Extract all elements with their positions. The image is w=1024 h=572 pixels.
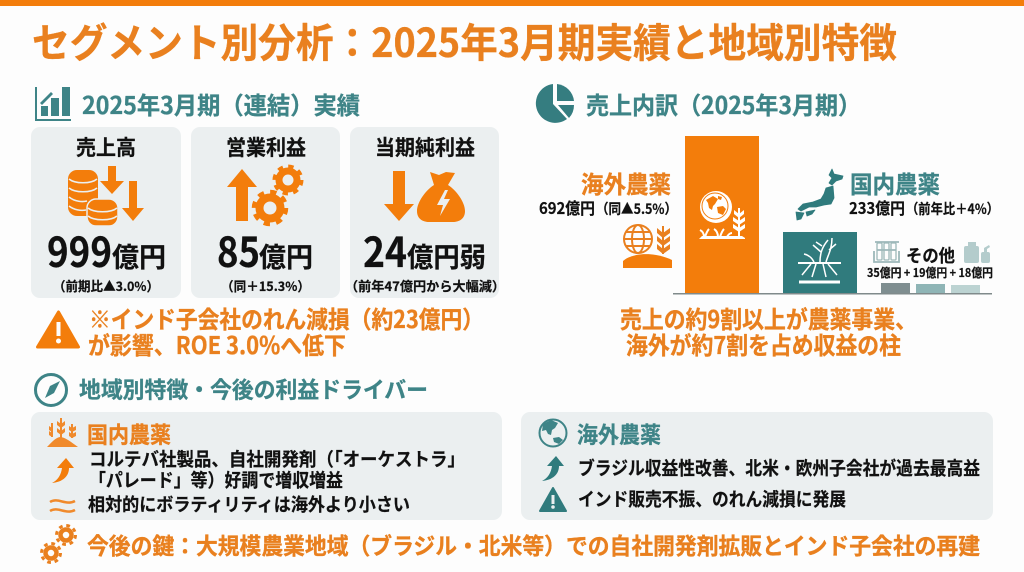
label: overseas: 海外農薬: [581, 165, 671, 200]
label: domestic: [849, 165, 999, 219]
label: domestic: 233億円: [849, 195, 905, 219]
label: other: その他: [906, 243, 955, 268]
bar: overseas: [685, 136, 759, 294]
panel: domestic agrochemicals: 国内農薬: [87, 418, 171, 450]
card: net profit: （前年47億円から大幅減）: [345, 276, 505, 295]
label: overseas: 692億円: [539, 195, 595, 219]
icon: test tubes: [874, 242, 899, 262]
label: overseas: [539, 165, 677, 219]
card: net profit: 億円弱: [407, 236, 486, 275]
panel: sales breakdown: [536, 84, 999, 361]
icon: up arrow and gears: [227, 166, 302, 224]
icon: globe: [540, 420, 566, 446]
icon: warning: [38, 312, 78, 347]
card: operating profit: 85: [217, 219, 260, 279]
panel: overseas agrochemicals: インド販売不振、のれん減損に発展: [578, 486, 846, 512]
panel: overseas agrochemicals: 海外農薬: [577, 418, 661, 450]
icon: compass: [36, 374, 66, 406]
panel: domestic agrochemicals: 相対的にボラティリティは海外より小さい: [88, 491, 410, 517]
bars: other segments: [881, 283, 980, 293]
card: operating profit: 億円: [259, 236, 313, 275]
callout: key to the future: 今後の鍵：大規模農業地域（ブラジル・北米等）での自社開発剤拡販とインド子会社の再建: [87, 527, 980, 561]
callout: impairment note: が影響、ROE 3.0%へ低下: [88, 326, 346, 361]
icon: warning: [540, 488, 566, 511]
icon: down arrow and money bag: [384, 171, 465, 222]
text: other values: 35億円 + 19億円 + 18億円: [867, 264, 993, 281]
conclusion text: 売上の約9割以上が農薬事業、: [620, 300, 917, 335]
card: sales: 999: [47, 219, 112, 279]
chart: sales bars: [673, 136, 992, 294]
panel: overseas agrochemicals: ブラジル収益性改善、北米・欧州子会社が過去最高益: [578, 455, 980, 481]
card: operating profit: （同＋15.3%）: [221, 276, 310, 295]
heading: results: 2025年3月期（連結）実績: [82, 86, 360, 121]
icon: gears: [42, 526, 76, 562]
top accent bar: [0, 0, 1024, 6]
icon: crops: [47, 418, 78, 447]
card: operating profit: [191, 127, 340, 298]
title: セグメント別分析：2025年3月期実績と地域別特徴: [32, 11, 897, 69]
icon: coins and down arrows: [68, 166, 144, 226]
axis: [673, 293, 992, 294]
card: operating profit: 営業利益: [226, 132, 306, 162]
icon: bottles: [964, 242, 990, 263]
icon: map of Japan: [796, 169, 843, 220]
icon: globe and wheat: [623, 225, 672, 268]
card: sales: [31, 127, 181, 298]
label: domestic: 国内農薬: [850, 165, 940, 200]
card: sales: （前期比▲3.0%）: [53, 276, 159, 295]
bar: domestic: [783, 232, 857, 294]
panel: domestic agrochemicals: [31, 412, 502, 520]
card: sales: 億円: [112, 236, 166, 275]
icon: rising arrow: [542, 456, 564, 481]
section: regional features: [31, 373, 993, 562]
label: overseas: （同▲5.5%）: [596, 199, 677, 219]
icon: waves: [50, 500, 75, 512]
icon: pie chart: [536, 84, 574, 123]
card: net profit: 当期純利益: [375, 132, 475, 162]
panel: domestic agrochemicals: コルテバ社製品、自社開発剤（「オーケストラ」: [89, 446, 465, 472]
callout: impairment note: ※インド子会社のれん減損（約23億円）: [89, 300, 484, 335]
card: sales: 売上高: [76, 132, 136, 162]
panel: overseas agrochemicals: [521, 412, 993, 520]
panel: domestic agrochemicals: 「パレード」等）好調で増収増益: [89, 467, 343, 493]
conclusion text: [620, 300, 917, 361]
card: net profit: 24: [363, 219, 407, 279]
label: domestic: （前年比＋4%）: [906, 199, 999, 219]
callout: impairment note: [38, 300, 484, 361]
conclusion text: 海外が約7割を占め収益の柱: [626, 326, 901, 361]
panel: consolidated results: [31, 86, 505, 361]
icon: bar chart: [35, 87, 71, 121]
icon: rising arrow: [52, 458, 74, 483]
heading: regional drivers: 地域別特徴・今後の利益ドライバー: [79, 373, 428, 405]
card: net profit: [345, 127, 505, 298]
heading: breakdown: 売上内訳（2025年3月期）: [586, 86, 861, 121]
